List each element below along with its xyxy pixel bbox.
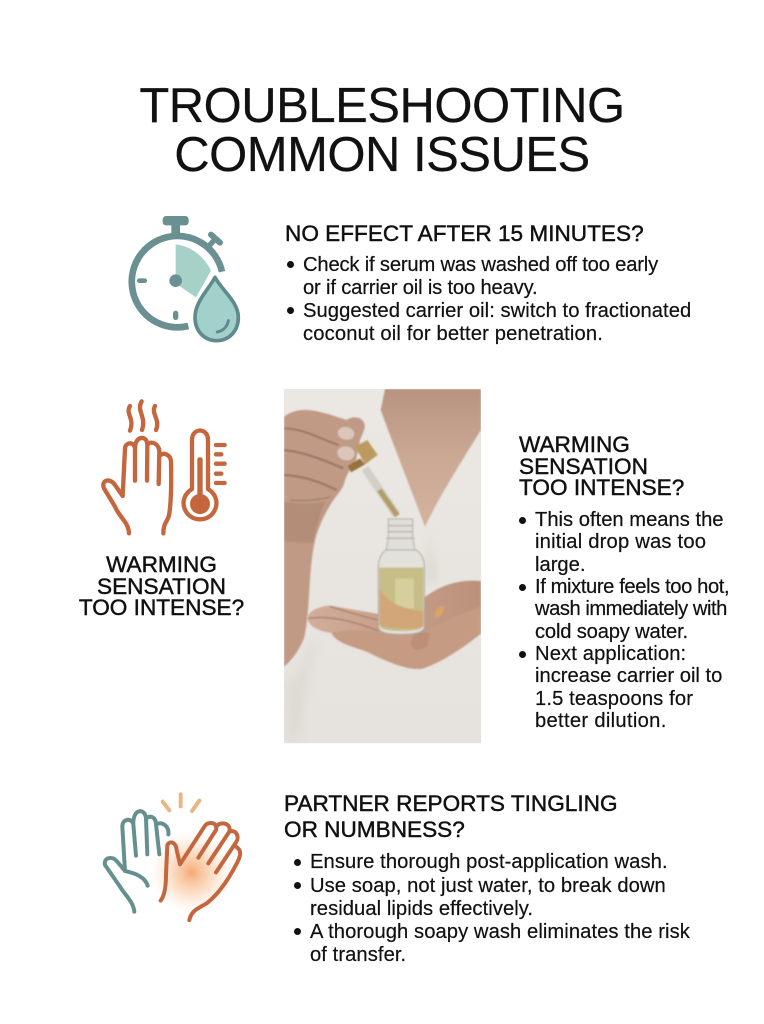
oil: [379, 568, 423, 631]
text block: no effect tips: Check if serum was washed off too early: [303, 254, 658, 276]
heading: warming sensation right: [518, 432, 684, 500]
text block: partner tips: A thorough soapy wash eliminates the risk: [310, 921, 690, 943]
text block: partner tips: Use soap, not just water, to break down: [310, 875, 666, 897]
text block: warming tips: This often means the: [535, 509, 724, 531]
heading: partner reports: OR NUMBNESS?: [284, 817, 465, 842]
text block: no effect tips: coconut oil for better penetration.: [303, 323, 603, 345]
dropper glass: [365, 468, 397, 515]
bottle neck: [386, 519, 415, 552]
heading: warming sensation right: WARMING: [519, 432, 630, 457]
heading: warming sensation left: WARMING: [106, 552, 217, 577]
heading: no effect: NO EFFECT AFTER 15 MINUTES?: [285, 221, 644, 246]
shaded wrist: [284, 502, 325, 543]
heading: partner reports: PARTNER REPORTS TINGLING: [284, 791, 618, 816]
heading: warming sensation left: TOO INTENSE?: [79, 595, 244, 620]
text block: warming tips: If mixture feels too hot,: [535, 576, 729, 598]
text block: warming tips: wash immediately with: [535, 598, 727, 620]
text block: warming tips: cold soapy water.: [535, 621, 688, 643]
text block: warming tips: better dilution.: [535, 710, 667, 732]
fingernails: [337, 426, 355, 441]
text block: partner tips: [294, 851, 690, 966]
text block: no effect tips: [287, 254, 691, 345]
title: COMMON ISSUES: [174, 128, 590, 182]
heading: warming sensation left: SENSATION: [97, 574, 226, 599]
finger creases: [284, 428, 338, 445]
text block: no effect tips: Suggested carrier oil: switch to fractionated: [303, 300, 691, 322]
thumb over bottle: [331, 608, 480, 662]
heading: warming sensation right: TOO INTENSE?: [519, 475, 684, 500]
text block: warming tips: 1.5 teaspoons for: [535, 688, 693, 710]
photo: oil dropper and bottle: [284, 389, 481, 744]
text block: warming tips: [519, 509, 729, 732]
lower hand: [307, 580, 481, 638]
title: TROUBLESHOOTING: [139, 79, 625, 133]
text block: partner tips: residual lipids effectively.: [310, 898, 533, 920]
icon: stopwatch and drop: [128, 216, 240, 342]
text block: partner tips: Ensure thorough post-application wash.: [310, 851, 668, 873]
text block: warming tips: large.: [535, 554, 586, 576]
icon: hot hand and thermometer: [101, 399, 227, 536]
bottle body: [378, 550, 424, 634]
heading: warming sensation left: [79, 552, 244, 620]
shirt shadows: [290, 672, 306, 732]
title: [139, 79, 625, 182]
heading: partner reports: [284, 791, 618, 842]
text block: partner tips: of transfer.: [310, 944, 406, 966]
text block: warming tips: Next application:: [535, 643, 686, 665]
heading: warming sensation right: SENSATION: [519, 454, 648, 479]
text block: warming tips: increase carrier oil to: [535, 665, 722, 687]
dropper cap: [355, 440, 378, 464]
chest skin: [381, 389, 481, 527]
text block: no effect tips: or if carrier oil is too heavy.: [303, 277, 537, 299]
text block: warming tips: initial drop was too: [535, 531, 706, 553]
upper hand and forearm: [284, 410, 365, 667]
icon: two hands touching: [102, 792, 242, 922]
